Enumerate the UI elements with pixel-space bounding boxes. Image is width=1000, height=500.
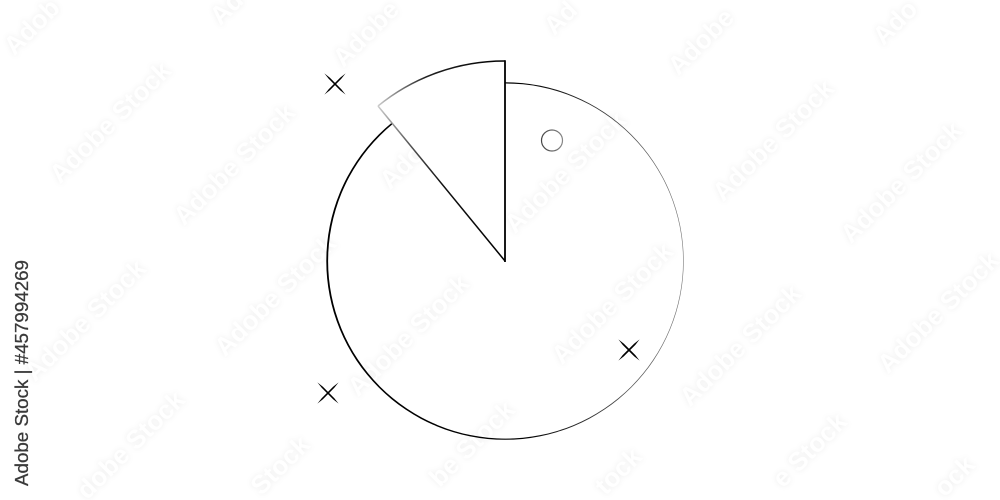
watermark pattern: Adobe Stock (706, 73, 840, 207)
watermark pattern: Adobe Stock (545, 236, 679, 370)
watermark pattern: Adobe Stock (341, 268, 475, 402)
watermark pattern: tock (589, 441, 648, 500)
watermark pattern: be Stock (423, 394, 521, 492)
watermark pattern: Adobe Stock (673, 278, 807, 412)
stock id side label: Adobe Stock | #457994269 (11, 260, 32, 486)
watermark pattern: Adobe Stock (43, 55, 177, 189)
watermark pattern: Adobe Stock (18, 253, 152, 387)
watermark pattern: Adobe Stock (498, 105, 632, 239)
watermark pattern: Adobe Stock (167, 97, 301, 231)
icon: cross top left (314, 63, 356, 105)
watermark pattern: Adobe (661, 2, 740, 81)
watermark pattern: Adobe Stock (208, 228, 342, 362)
watermark pattern: e Stock (766, 406, 853, 493)
pie chart raised slice (378, 60, 505, 262)
icon: cross lower left (307, 372, 349, 414)
watermark pattern: Stock (244, 429, 316, 500)
icon: small circle (542, 130, 562, 151)
icon: cross lower right (608, 329, 650, 371)
watermark pattern: Adobe Stock (373, 61, 507, 195)
pie chart circle (326, 82, 684, 440)
watermark pattern: Adobe Stock (834, 115, 968, 249)
